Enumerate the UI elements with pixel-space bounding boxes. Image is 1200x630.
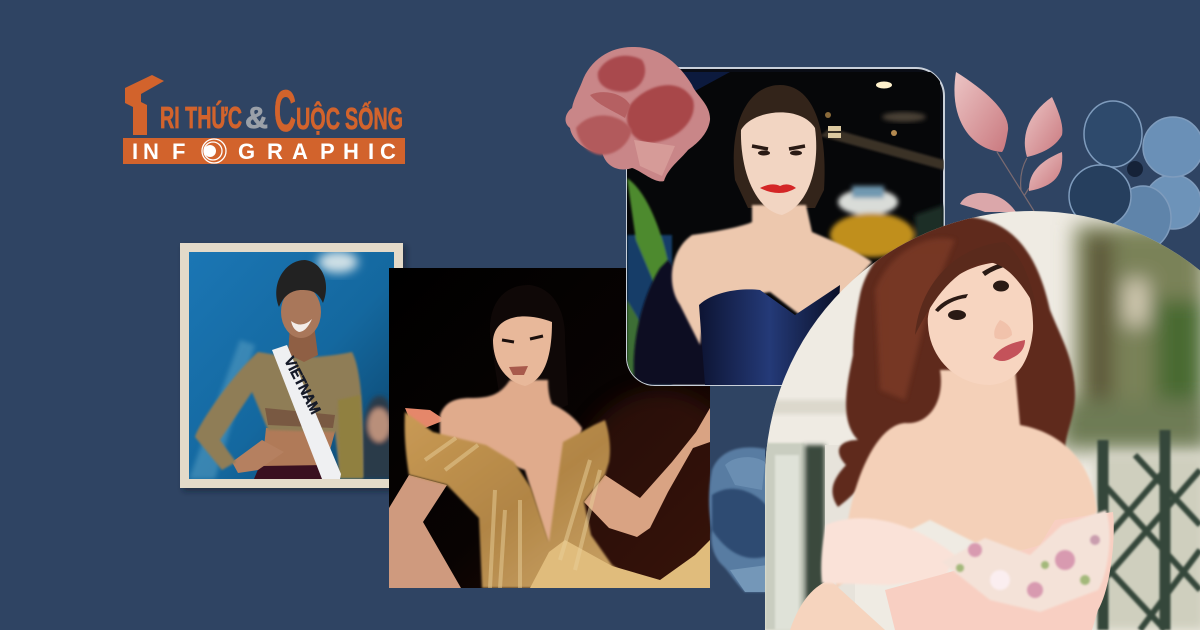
photo 3 face bbox=[741, 112, 816, 215]
photo 1 hair bbox=[276, 260, 326, 307]
photo 1 trousers bbox=[254, 465, 322, 479]
photo 3 flower arrangement bbox=[830, 186, 944, 260]
photo 2 gold gown bbox=[405, 412, 645, 588]
photo 4 floral bodice bbox=[942, 510, 1110, 612]
photo 4 eyes and brows bbox=[935, 262, 1010, 320]
blue flower upper right petal bbox=[1143, 117, 1200, 177]
logo: Tri thức & Cuộc sống Infographic bbox=[123, 75, 405, 164]
blue flower lower petals bbox=[1145, 175, 1200, 229]
photo 4: arch portrait of woman in pink dress bbox=[765, 205, 1200, 630]
sprig stems bbox=[997, 152, 1034, 211]
pink leaf sprig illustration bbox=[954, 72, 1062, 212]
photo 3 left foliage bbox=[627, 178, 672, 385]
rose bud bbox=[598, 56, 645, 92]
logo wordmark: C bbox=[274, 79, 296, 144]
photo 3 shoulders and chest bbox=[672, 205, 872, 345]
photo 4 wall and window bbox=[765, 400, 855, 414]
logo wordmark: & bbox=[245, 100, 268, 135]
photo 1 sash text: VIETNAM bbox=[280, 354, 324, 417]
photo 2 right arm bbox=[584, 408, 710, 537]
blue flower illustration bbox=[1069, 101, 1200, 250]
photo 1 sequin top bbox=[195, 352, 363, 478]
photo 3 fur wrap bbox=[634, 260, 708, 385]
logo wordmark: SỐNG bbox=[345, 100, 403, 136]
logo wordmark: UỘC bbox=[296, 100, 340, 136]
rose petals bbox=[627, 85, 694, 143]
blue flower centre bbox=[1127, 161, 1143, 177]
photo 4 hair fringe bbox=[915, 262, 1030, 334]
photo 4 neck and shoulders bbox=[835, 370, 1097, 590]
dark blue flower illustration bbox=[709, 447, 770, 592]
photo 4 garden background bbox=[1060, 225, 1200, 450]
photo 3 navy dress bbox=[699, 285, 840, 385]
photo 1 midriff and hand bbox=[262, 428, 336, 466]
photo 2 skirt tulle bbox=[530, 540, 710, 588]
photo 2 sleeve flare bbox=[405, 408, 442, 428]
photo 4 nose bbox=[994, 320, 1012, 339]
photo 4 tulle sleeve bbox=[821, 518, 955, 585]
bottom leaf bbox=[960, 193, 1016, 212]
photo 1 frame bbox=[180, 243, 403, 488]
logo T mark bbox=[125, 75, 164, 135]
photo 3: contestant in navy velvet dress bbox=[627, 68, 944, 385]
photo 4 hair bbox=[832, 217, 1077, 507]
lower small leaf bbox=[1029, 152, 1062, 191]
photo 1: contestant with Vietnam sash bbox=[180, 243, 403, 488]
photo 3 hair bbox=[734, 85, 825, 208]
photo 1 background person bbox=[362, 394, 389, 479]
photo 2: contestant in gold gown bbox=[389, 268, 710, 588]
logo wordmark bbox=[160, 79, 403, 144]
photo 4 lips bbox=[993, 340, 1025, 361]
photo 1 head and neck bbox=[288, 330, 318, 362]
photo 4 arm and lower tulle bbox=[790, 580, 885, 630]
photo 2 torso skin bbox=[440, 380, 582, 545]
rose flower illustration bbox=[566, 47, 710, 181]
blue flower dark petals bbox=[1084, 101, 1142, 167]
photo 4 lattice bbox=[1096, 429, 1200, 630]
photo 4 dress bbox=[885, 512, 1114, 630]
logo banner text: INF O GRAPHIC bbox=[132, 139, 396, 164]
logo wordmark: RI THỨC bbox=[160, 99, 242, 135]
photo 2 left arm bbox=[389, 475, 461, 588]
logo O swirl bbox=[202, 139, 226, 163]
photo 2 face bbox=[493, 316, 552, 386]
large leaf bbox=[954, 72, 1008, 152]
upper small leaf bbox=[1025, 97, 1062, 157]
logo banner bbox=[123, 138, 405, 164]
photo 4 face bbox=[928, 262, 1033, 385]
photo 1 sash bbox=[272, 345, 341, 479]
photo 2 hair back bbox=[490, 285, 567, 404]
